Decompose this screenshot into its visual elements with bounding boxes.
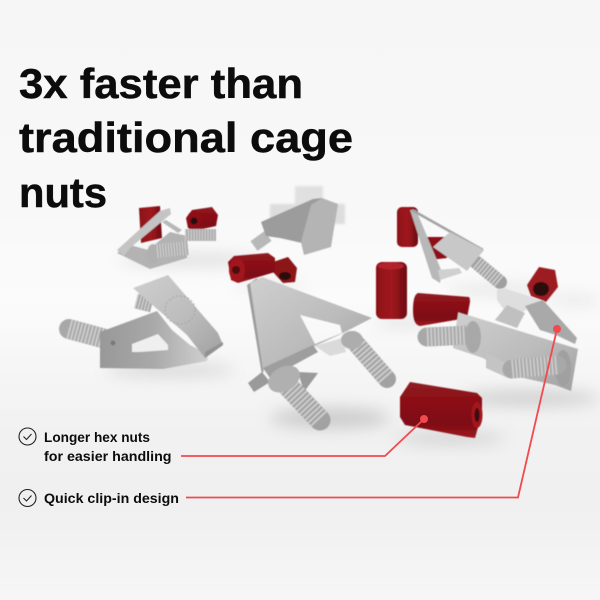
title: nuts xyxy=(19,169,107,216)
text: longer hex nuts: for easier handling xyxy=(44,448,172,464)
product: small clip with nuts, back left xyxy=(117,206,218,269)
title: 3x faster than xyxy=(19,60,303,107)
callout line: clip-in xyxy=(186,325,561,498)
callout line: hex nuts xyxy=(181,415,428,456)
nuts: centre xyxy=(228,253,297,283)
red nut: large foreground xyxy=(400,382,482,438)
product: large clip left xyxy=(69,275,223,369)
red nuts: right xyxy=(376,262,558,326)
product: centre back clip xyxy=(254,186,345,255)
icon: check circle 2 xyxy=(19,490,36,506)
icon: check circle 1 xyxy=(19,428,36,445)
product: back right clip and nuts xyxy=(397,207,500,283)
title xyxy=(19,60,353,216)
title: traditional cage xyxy=(19,114,353,161)
product: large clip centre xyxy=(247,277,387,420)
text: longer hex nuts xyxy=(44,429,172,464)
soft ground shadows xyxy=(105,256,600,443)
text: longer hex nuts: Longer hex nuts xyxy=(44,429,150,445)
text: quick clip-in design: Quick clip-in design xyxy=(44,490,179,506)
product: clip right xyxy=(427,288,578,391)
